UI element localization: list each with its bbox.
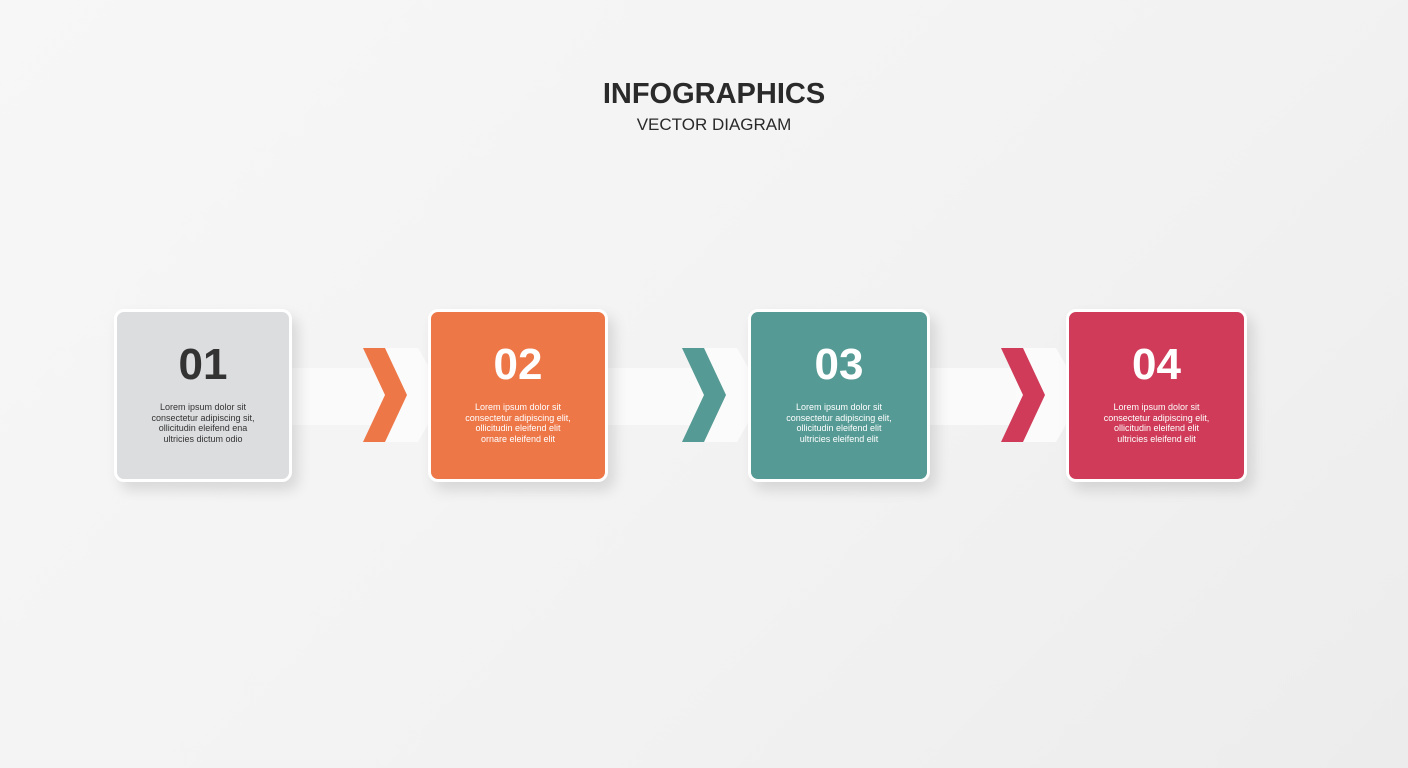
box 01: Lorem ipsum dolor sit [160, 402, 246, 412]
box 01: consectetur adipiscing sit, [151, 412, 255, 422]
box 03: Lorem ipsum dolor sit [796, 402, 882, 412]
arrow 1 [288, 348, 445, 442]
box 01 [114, 309, 292, 482]
box 02 [428, 309, 608, 482]
box 04: consectetur adipiscing elit, [1104, 412, 1209, 422]
box 04: ultricies eleifend elit [1117, 434, 1196, 444]
box 01: ollicitudin eleifend ena [159, 423, 247, 433]
box 01: 01 [179, 340, 227, 389]
arrow 2 [604, 348, 764, 442]
box 03: consectetur adipiscing elit, [786, 412, 892, 422]
box 02: consectetur adipiscing elit, [465, 412, 571, 422]
box 03: ollicitudin eleifend elit [796, 423, 882, 433]
box 01: ultricies dictum odio [163, 434, 243, 444]
box 04 [1066, 309, 1247, 482]
box 02: ornare eleifend elit [481, 434, 555, 444]
box 03 [748, 309, 930, 482]
box 04: ollicitudin eleifend elit [1114, 423, 1199, 433]
arrow 3 [926, 348, 1083, 442]
subtitle: VECTOR DIAGRAM [637, 115, 791, 134]
box 04: Lorem ipsum dolor sit [1113, 402, 1200, 412]
box 03: 03 [815, 340, 863, 389]
title: INFOGRAPHICS [603, 78, 825, 110]
box 02: 02 [494, 340, 542, 389]
box 04: 04 [1132, 340, 1181, 389]
box 02: Lorem ipsum dolor sit [475, 402, 561, 412]
box 03: ultricies eleifend elit [800, 434, 878, 444]
box 02: ollicitudin eleifend elit [475, 423, 561, 433]
